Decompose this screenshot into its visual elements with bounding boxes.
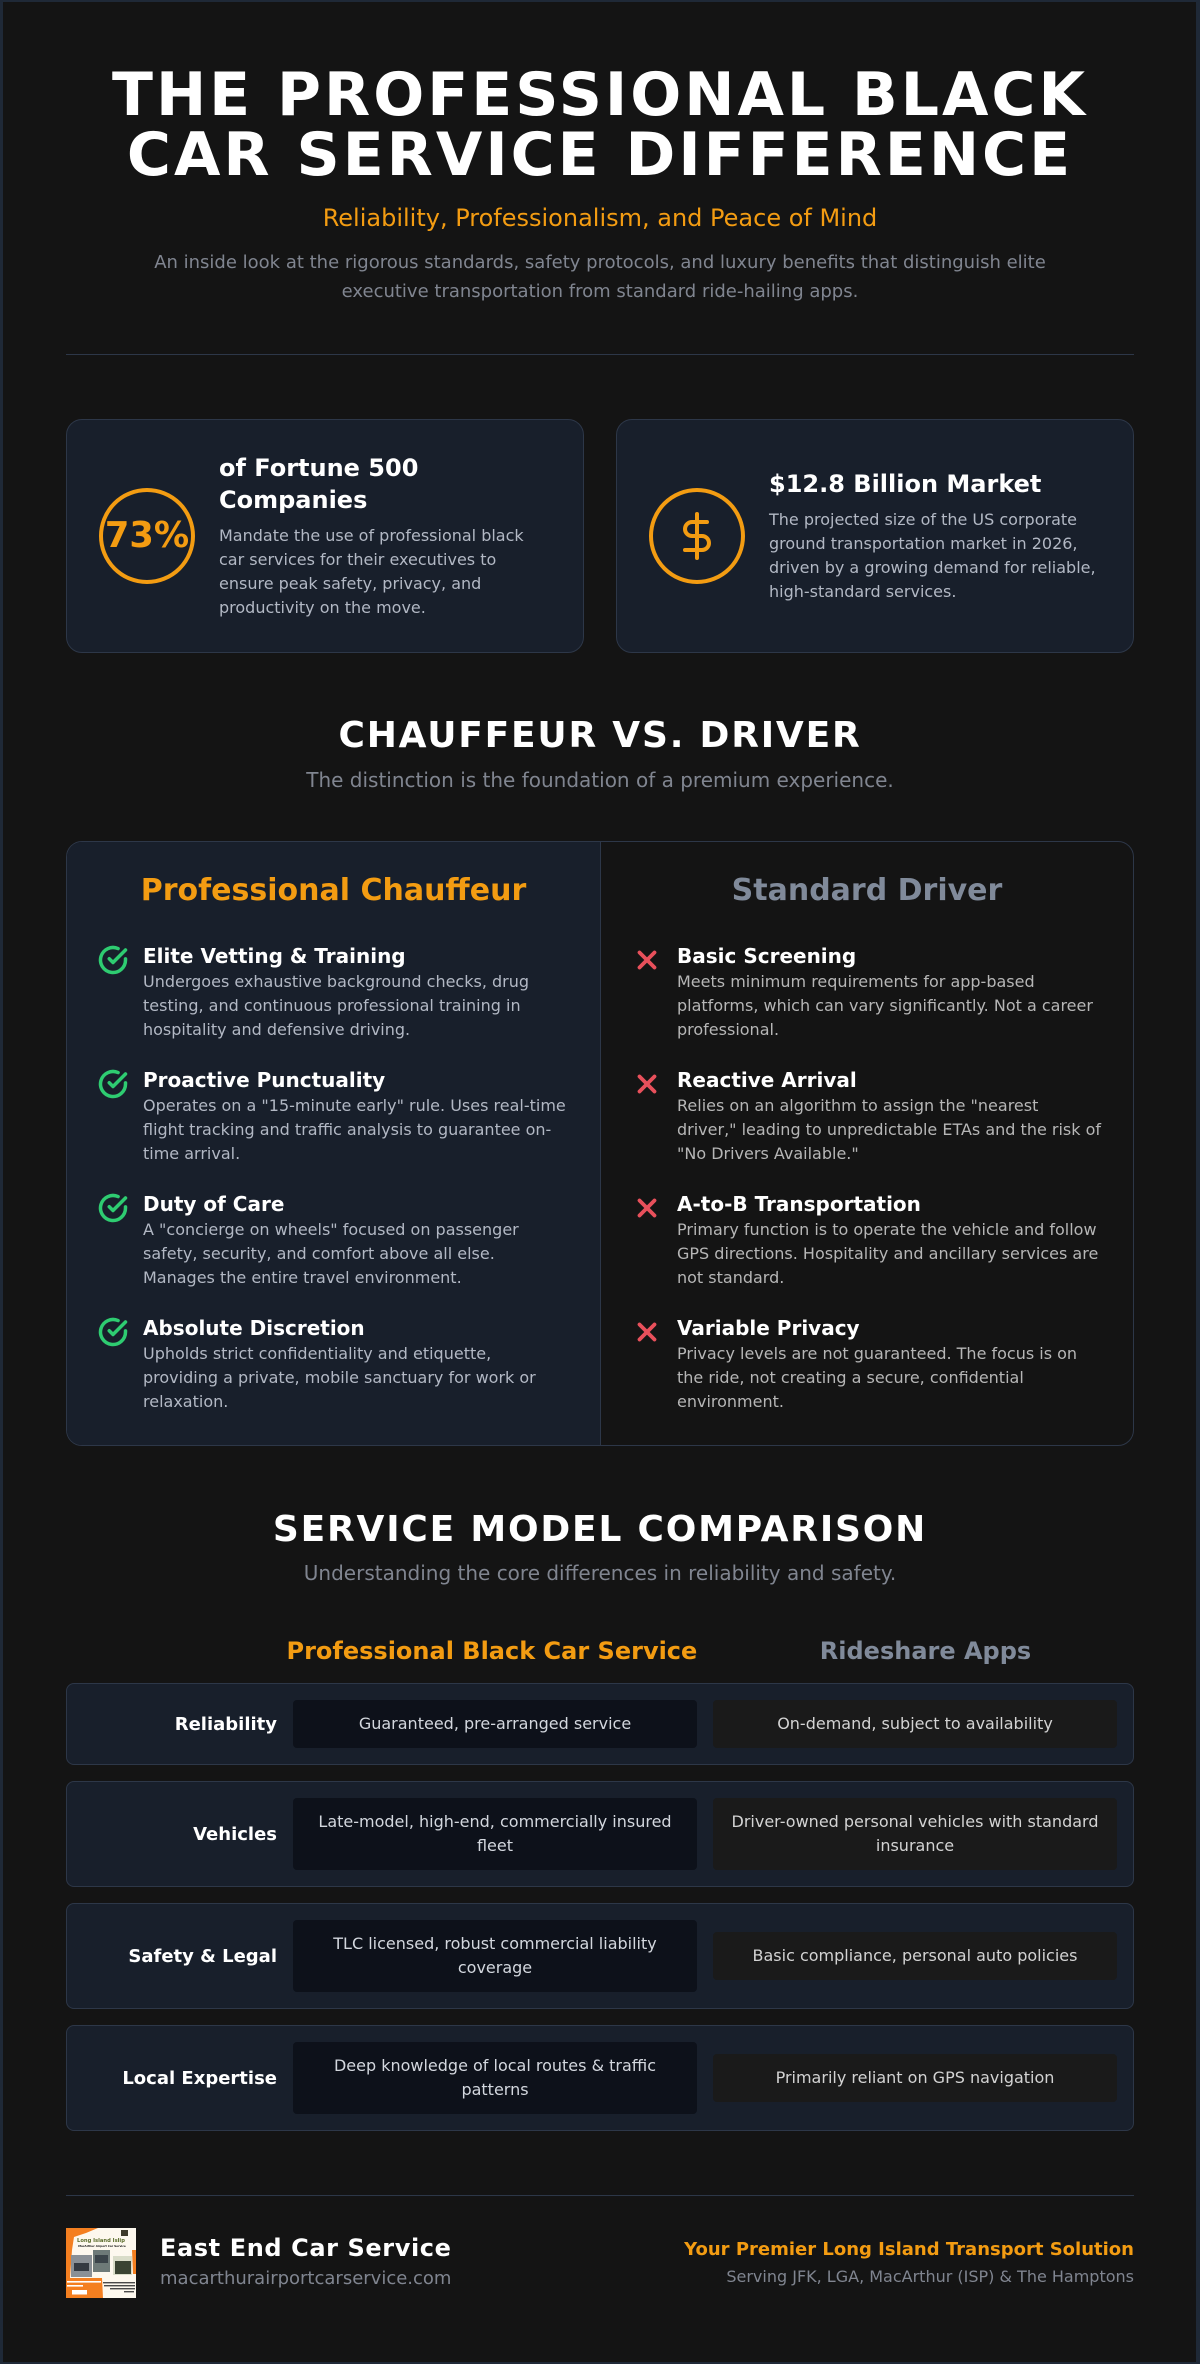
item text: GPS directions. Hospitality and ancillary services are (677, 1244, 1098, 1263)
item text (677, 1192, 1098, 1287)
cell: black car: Deep knowledge of local routes & traffic patterns (334, 2056, 656, 2099)
column header: professional black car service: Professional Black Car Service (286, 1637, 697, 1665)
stat heading: $12.8 Billion Market (769, 470, 1041, 498)
stat description: high-standard services. (769, 582, 956, 601)
cell: rideshare (713, 2054, 1117, 2102)
stat description: car services for their executives to (219, 550, 496, 569)
item text: platforms, which can vary significantly. Not a career (677, 996, 1093, 1015)
row label: Reliability (175, 1714, 277, 1734)
item text: A "concierge on wheels" focused on passenger (143, 1220, 519, 1239)
footer logo: Long Island Islip (77, 2238, 125, 2244)
icon: cross (638, 1074, 656, 1094)
intro text (154, 252, 1046, 302)
title: CAR SERVICE DIFFERENCE (127, 120, 1073, 190)
item: proactive punctuality (98, 1068, 566, 1163)
item text: time arrival. (143, 1144, 240, 1163)
item text: Reactive Arrival (677, 1068, 857, 1092)
stat description: Mandate the use of professional black (219, 526, 524, 545)
item text (143, 1316, 536, 1411)
stat description: ensure peak safety, privacy, and (219, 574, 481, 593)
item text: A-to-B Transportation (677, 1192, 921, 1216)
cell: rideshare (713, 1932, 1117, 1980)
cell: black car (293, 1798, 697, 1870)
icon: 73% ring: 73% (105, 515, 189, 556)
icon: check (98, 1194, 128, 1222)
item text: Manages the entire travel environment. (143, 1268, 462, 1287)
title: THE PROFESSIONAL BLACK (112, 60, 1088, 130)
icon: cross (638, 1322, 656, 1342)
footer tagline: Your Premier Long Island Transport Solution (684, 2239, 1134, 2260)
item text: Upholds strict confidentiality and etiquette, (143, 1344, 491, 1363)
item text: professional. (677, 1020, 779, 1039)
item text: Absolute Discretion (143, 1316, 365, 1340)
item text (677, 1068, 1102, 1163)
item text (143, 944, 529, 1039)
item: absolute discretion (98, 1316, 536, 1411)
stat description (219, 526, 524, 617)
item text (143, 1068, 566, 1163)
item text: Elite Vetting & Training (143, 944, 406, 968)
footer service area: Serving JFK, LGA, MacArthur (ISP) & The Hamptons (726, 2267, 1134, 2286)
item text (143, 1192, 519, 1287)
item text: "No Drivers Available." (677, 1144, 859, 1163)
section subheading: Understanding the core differences in reliability and safety. (304, 1561, 896, 1585)
cell: black car: Late-model, high-end, commercially insured fleet (318, 1812, 672, 1855)
icon: check (98, 1318, 128, 1346)
item text (677, 944, 1093, 1039)
section subheading: The distinction is the foundation of a premium experience. (306, 768, 894, 792)
item: duty of care (98, 1192, 519, 1287)
subtitle: Reliability, Professionalism, and Peace of Mind (323, 204, 877, 232)
heading: service model comparison: SERVICE MODEL COMPARISON (273, 1509, 927, 1550)
cell: black car: Guaranteed, pre-arranged service (359, 1714, 631, 1733)
panel: stat 73 percent (66, 419, 584, 653)
column heading: Professional Chauffeur (141, 873, 526, 908)
title (112, 60, 1088, 190)
item: elite vetting (98, 944, 529, 1039)
stat description: productivity on the move. (219, 598, 426, 617)
item text: testing, and continuous professional training in (143, 996, 521, 1015)
cell: rideshare: Driver-owned personal vehicles with standard insurance (732, 1812, 1098, 1855)
item text: the ride, not creating a secure, confidential (677, 1368, 1024, 1387)
cell: rideshare: Primarily reliant on GPS navigation (776, 2068, 1054, 2087)
item text: Meets minimum requirements for app-based (677, 972, 1035, 991)
stat heading (219, 454, 418, 514)
panel: stat market size (616, 419, 1134, 653)
footer brand name: East End Car Service (160, 2234, 452, 2262)
cell: rideshare (713, 1700, 1117, 1748)
stat description: ground transportation market in 2026, (769, 534, 1078, 553)
icon: cross (638, 950, 656, 970)
cell: rideshare: Basic compliance, personal auto policies (753, 1946, 1077, 1965)
icon: dollar ring (649, 488, 745, 584)
icon: check (98, 1070, 128, 1098)
cell: black car (293, 2042, 697, 2114)
item text: providing a private, mobile sanctuary for work or (143, 1368, 536, 1387)
stat description (768, 510, 1096, 601)
item text: Undergoes exhaustive background checks, drug (143, 972, 529, 991)
item text (677, 1316, 1077, 1411)
stat description: The projected size of the US corporate (769, 510, 1077, 529)
footer logo: MacArthur Airport Car Service (78, 2244, 126, 2248)
item text: hospitality and defensive driving. (143, 1020, 410, 1039)
row: reliability (66, 1683, 1134, 1765)
cell: black car (293, 1700, 697, 1748)
heading: chauffeur vs driver: CHAUFFEUR VS. DRIVER (339, 715, 861, 756)
row label: Local Expertise (122, 2068, 277, 2088)
item text: Basic Screening (677, 944, 856, 968)
intro text: An inside look at the rigorous standards, safety protocols, and luxury benefits that distinguish elite (154, 252, 1046, 273)
item text: Privacy levels are not guaranteed. The focus is on (677, 1344, 1077, 1363)
footer logo (66, 2228, 136, 2298)
item: reactive arrival (638, 1068, 1102, 1163)
item text: safety, security, and comfort above all else. (143, 1244, 495, 1263)
row: local expertise (66, 2025, 1134, 2131)
row label: Safety & Legal (128, 1946, 277, 1966)
row label: Vehicles (193, 1824, 277, 1844)
item text: Variable Privacy (677, 1316, 860, 1340)
stat description: driven by a growing demand for reliable, (769, 558, 1096, 577)
icon: 73% ring (99, 488, 195, 584)
column heading: Standard Driver (732, 873, 1002, 908)
stat heading: of Fortune 500 (219, 454, 418, 482)
item text: driver," leading to unpredictable ETAs and the risk of (677, 1120, 1101, 1139)
icon: cross (638, 1198, 656, 1218)
footer website: macarthurairportcarservice.com (160, 2268, 451, 2288)
cell: rideshare (713, 1798, 1117, 1870)
item text: Duty of Care (143, 1192, 284, 1216)
row: safety and legal (66, 1903, 1134, 2009)
item: basic screening (638, 944, 1093, 1039)
intro text: executive transportation from standard ride-hailing apps. (342, 281, 858, 302)
cell: black car: TLC licensed, robust commercial liability coverage (333, 1934, 657, 1977)
item text: Operates on a "15-minute early" rule. Uses real-time (143, 1096, 566, 1115)
cell: black car (293, 1920, 697, 1992)
column header: rideshare apps: Rideshare Apps (820, 1637, 1031, 1665)
item text: relaxation. (143, 1392, 228, 1411)
item text: flight tracking and traffic analysis to guarantee on- (143, 1120, 551, 1139)
item text: not standard. (677, 1268, 784, 1287)
stat heading: Companies (219, 486, 367, 514)
item text: Relies on an algorithm to assign the "nearest (677, 1096, 1038, 1115)
column: standard driver (638, 873, 1102, 1411)
cell: rideshare: On-demand, subject to availability (777, 1714, 1053, 1733)
icon: check (98, 946, 128, 974)
row: vehicles (66, 1781, 1134, 1887)
item text: environment. (677, 1392, 784, 1411)
item: variable privacy (638, 1316, 1077, 1411)
panel: chauffeur vs driver comparison (66, 841, 1134, 1446)
item text: Proactive Punctuality (143, 1068, 385, 1092)
item: a-to-b transportation (638, 1192, 1098, 1287)
item text: Primary function is to operate the vehicle and follow (677, 1220, 1097, 1239)
column: professional chauffeur (67, 842, 601, 1445)
